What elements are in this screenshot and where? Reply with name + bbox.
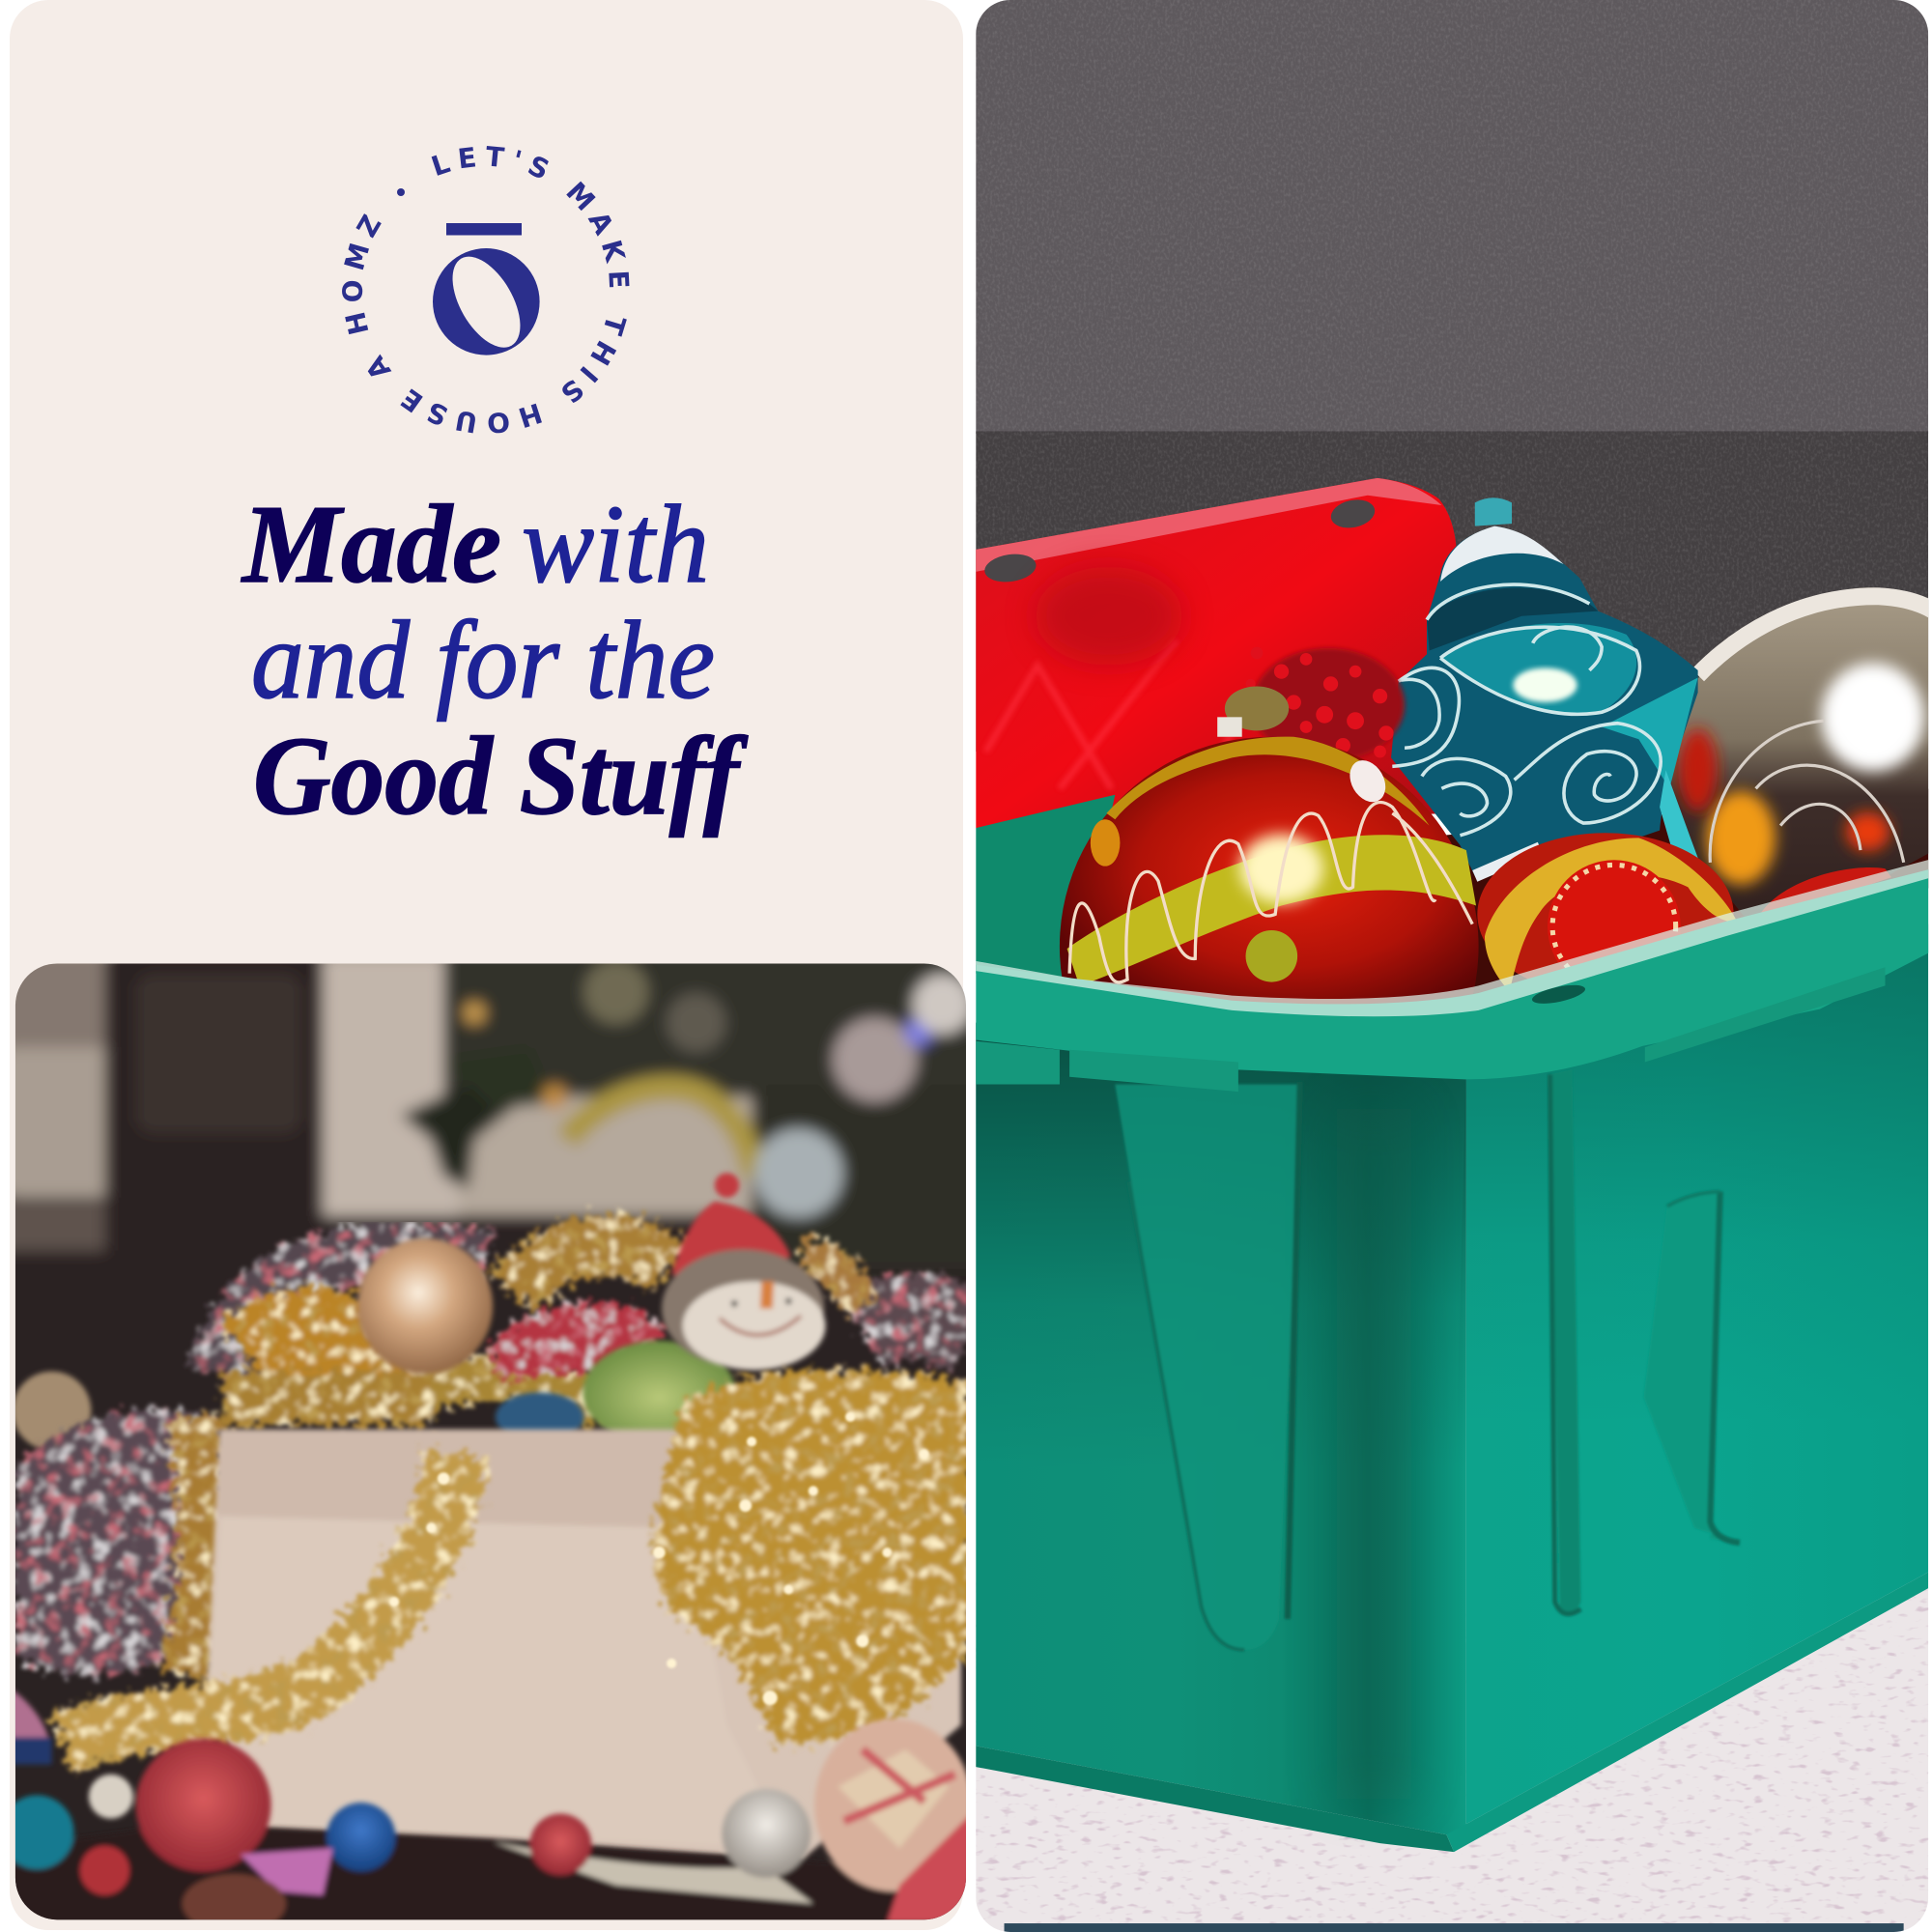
bauble: teal [1391,497,1707,881]
carpet speckle [976,1577,1928,1928]
bauble: large red [1060,737,1479,1005]
garland: red tinsel cluster [487,1301,666,1378]
teal spirals [1392,584,1661,836]
right face shade [1446,924,1928,1834]
rim hole [1530,981,1587,1008]
left face [976,1023,1466,1834]
red ball scribble [1069,803,1472,982]
photo backdrop [0,949,985,1932]
silver rim [1698,596,1932,675]
bin rim [976,859,1932,1092]
red ball orange dot [1091,819,1120,867]
rib: corner recess [1550,1069,1580,1616]
heading word: with: with [522,483,709,607]
bottom edge right [1446,1573,1928,1852]
heading line: and for the: and for the [251,599,715,723]
heading line: Good Stuff: Good Stuff [253,715,749,838]
background wall [976,0,1928,434]
bottom edge left [976,1746,1454,1852]
red ball glare [1239,835,1323,903]
garland: box strand [62,1454,456,1744]
silver glare [1821,663,1924,771]
rim tabs [976,967,1886,1092]
bin inner shadow [1355,788,1932,1023]
logo letter o counter [439,245,534,358]
berry spray [1217,647,1405,761]
bottom strip [1005,1923,1904,1932]
lid hole right [1328,496,1378,531]
garland: gold tinsel rows [185,1246,863,1676]
right face [1446,924,1928,1834]
lid [976,478,1457,828]
bauble: small red gold [1477,833,1737,996]
teal white base band [1475,848,1540,876]
garland: large gold tinsel [654,1369,974,1745]
heading word: Made: Made [241,483,501,607]
garland: red and silver left pile [14,1409,215,1676]
slot handle [1644,1191,1740,1543]
logo: circular badge [342,146,630,433]
cardboard box [207,1430,961,1861]
carpet floor [976,1565,1928,1932]
bauble: silver [1663,587,1932,924]
photo: cardboard box of tinsel and ornaments [0,949,985,1932]
silver reflection [1707,791,1776,885]
lid hole left [982,551,1037,585]
small ball red centre [1548,860,1681,993]
panel: cream background [10,0,963,1930]
left face shade [976,1023,1466,1834]
teal bright panel [1440,623,1636,714]
logo dot [397,188,405,196]
logo ring text: LET'S MAKE THIS HOUSE A HOMZ [342,146,630,433]
red ball white spot [1343,753,1393,809]
rim highlight [976,859,1932,1016]
fabric texture [976,0,1928,764]
lid edge [976,478,1441,572]
heading [241,483,749,838]
ornament: green bauble [582,1341,735,1444]
logo letter o [433,248,540,355]
teal cap [1475,497,1512,526]
bauble: tiny red [1756,867,1891,922]
ornament: blue bauble [496,1392,584,1441]
red ball gold dot [1246,930,1297,982]
red ball gold band [1067,835,1476,985]
teal lower edge glow [1660,770,1707,881]
photo: green storage tote with red lid and baubles [976,0,1932,1932]
teal glare [1513,668,1577,702]
ornaments on the table [0,1688,985,1932]
tinsel sparkles [389,1412,929,1705]
teal dome [1440,526,1564,582]
teal right panel [1602,678,1698,788]
decoration: snowman [662,1173,826,1370]
rib: tapered recess [1115,1082,1300,1650]
corner dark band [1337,1109,1410,1799]
ornament: gold bauble [357,1238,493,1374]
logo macron bar [446,223,522,236]
bin inner wall [976,795,1115,985]
garland: upper red silver tinsel [219,1253,974,1374]
ornament: background gold bauble [13,1372,91,1450]
teal upper band [1427,587,1598,650]
sofa base [976,431,1928,752]
